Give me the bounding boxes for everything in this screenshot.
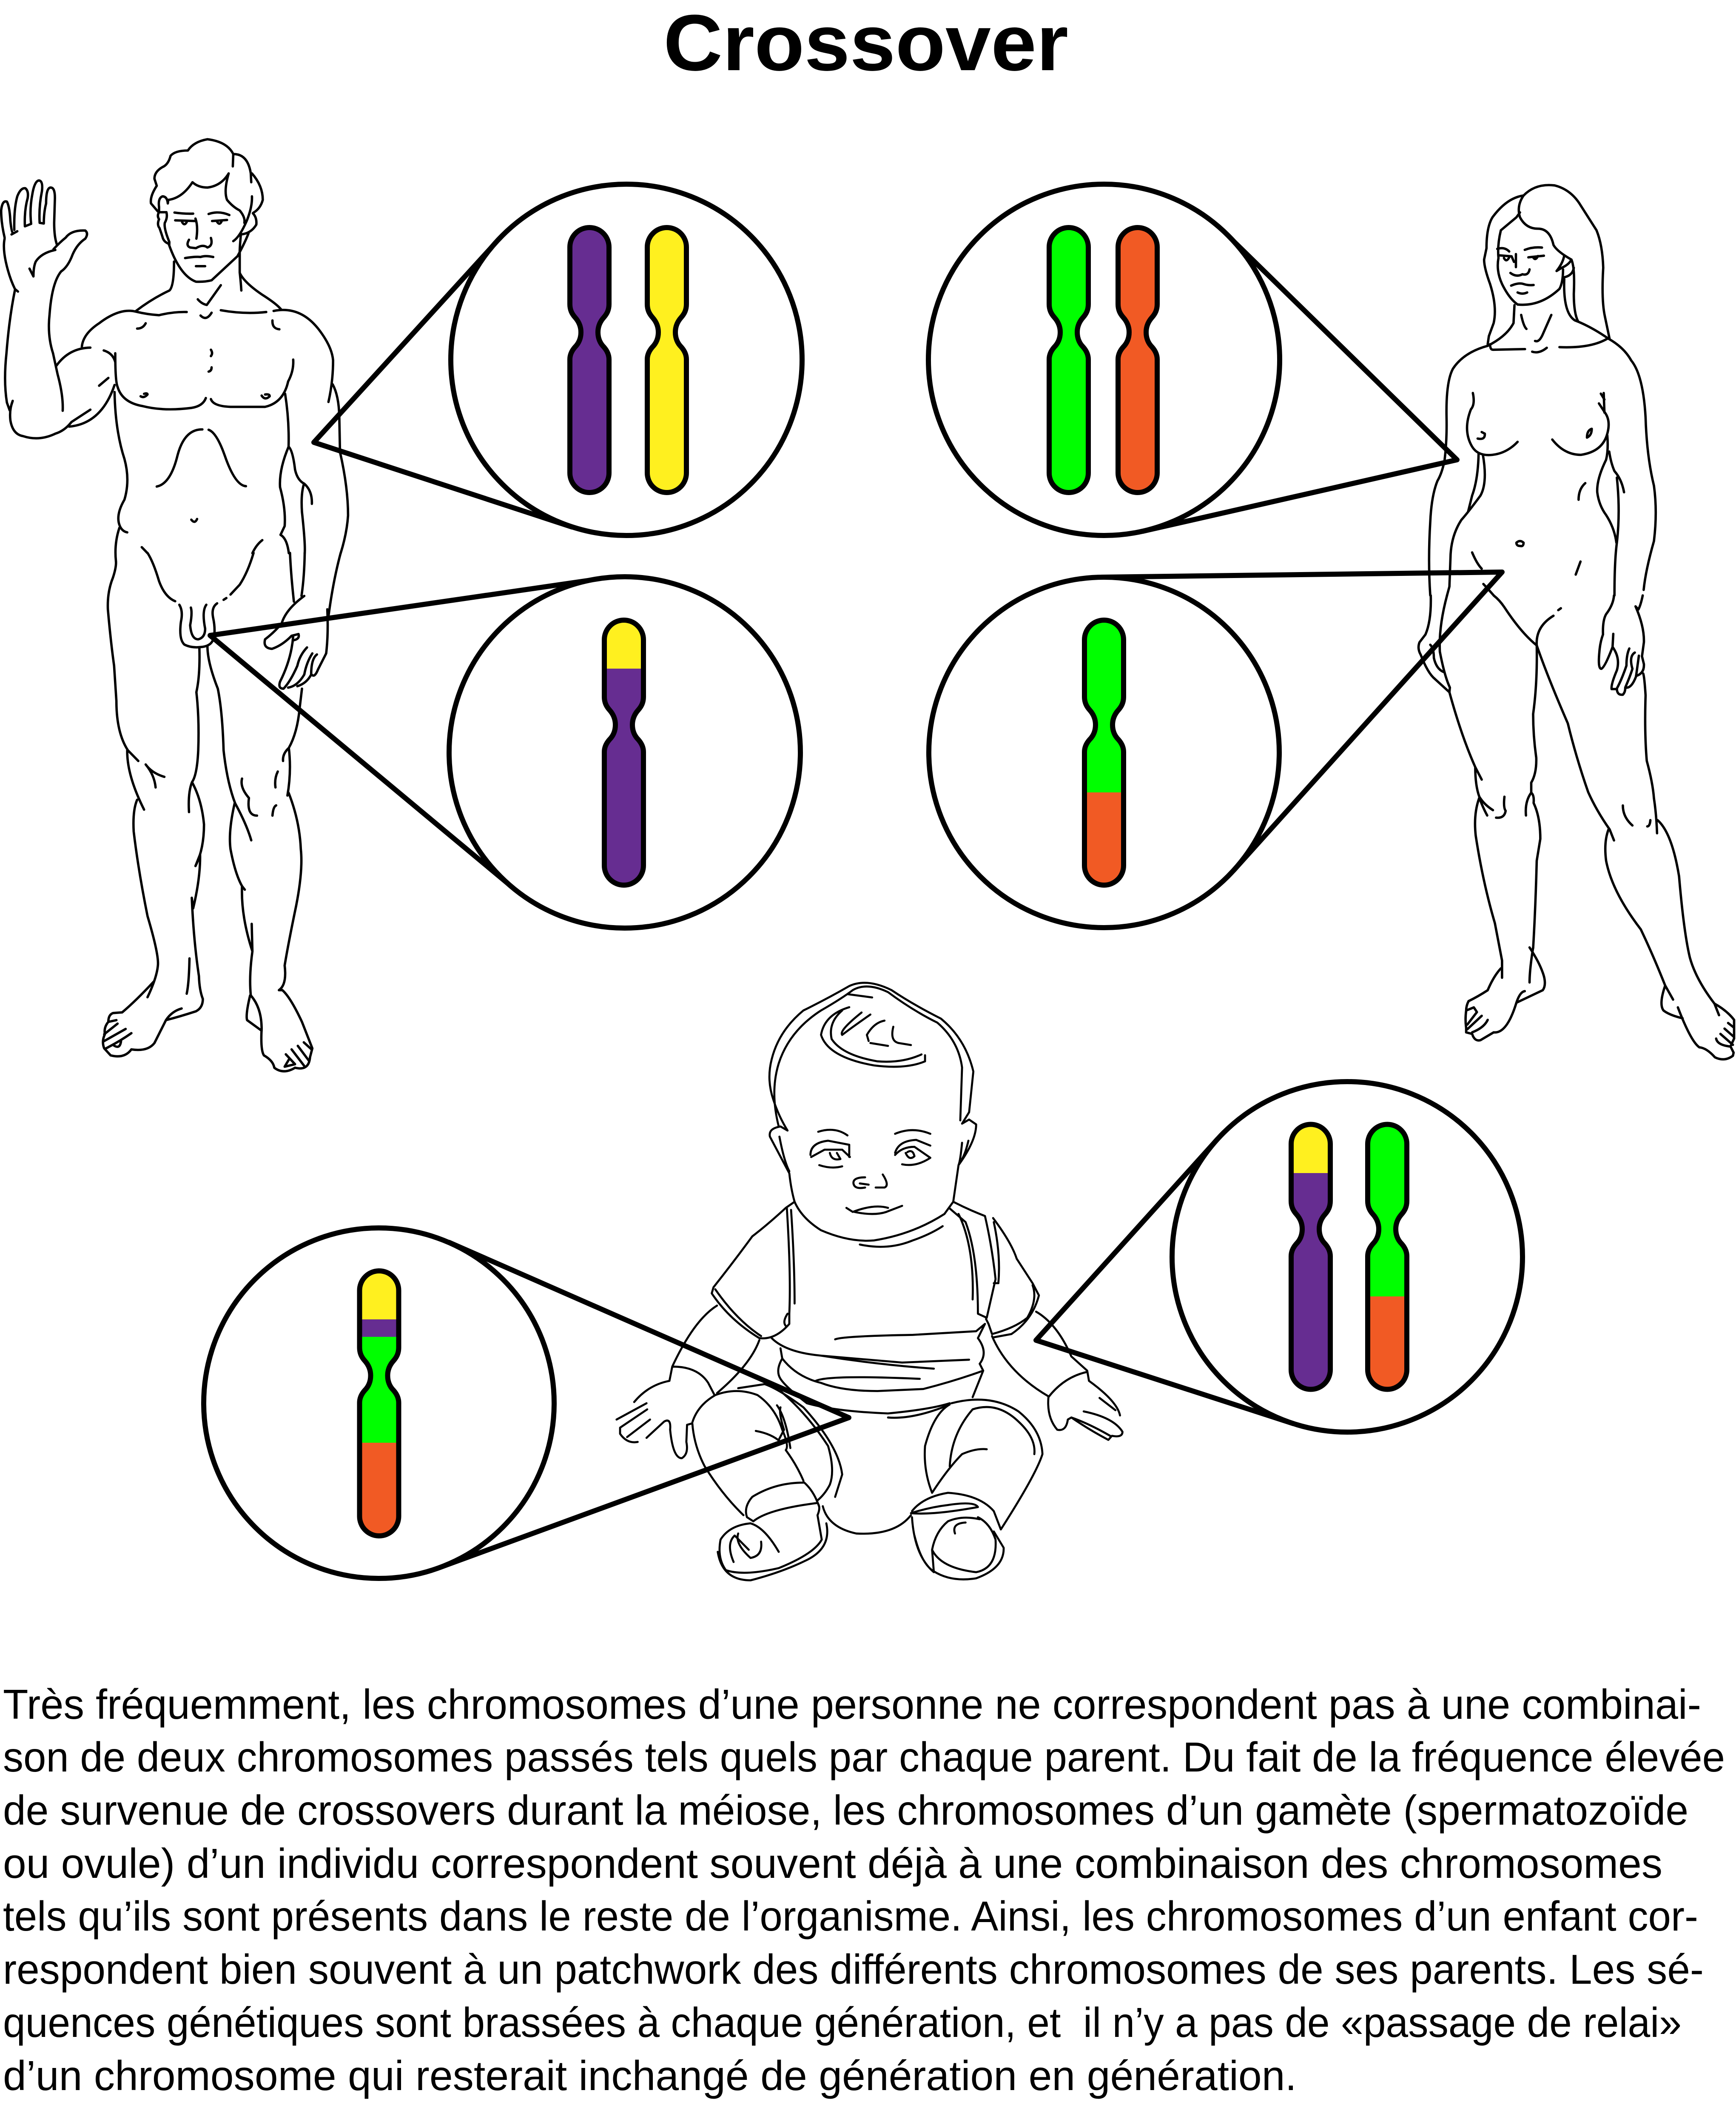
woman: hand at left <box>1419 595 1450 692</box>
woman: lower body <box>1419 595 1734 1060</box>
man: lowered hand <box>265 553 341 689</box>
pointer to man's groin <box>210 579 600 888</box>
pointer to baby's groin <box>439 1242 849 1568</box>
magnifier circle <box>449 577 800 928</box>
explanatory paragraph: de survenue de crossovers durant la méiose, les chromosomes d’un gamète (spermatozoïde <box>3 1787 1688 1834</box>
magnifier circle <box>929 577 1279 928</box>
baby: belly folds <box>771 1324 985 1418</box>
title: Crossover <box>663 0 1068 87</box>
man: raised hand <box>1 180 87 291</box>
callout: mother somatic chromosomes <box>928 184 1457 535</box>
chromosome: green <box>1047 225 1090 498</box>
chromosome: orange <box>1116 225 1159 498</box>
pointer to woman's groin <box>1102 572 1502 870</box>
woman: hair <box>1484 185 1610 344</box>
figure: baby <box>617 983 1122 1581</box>
magnifier circle <box>1172 1082 1523 1432</box>
explanatory paragraph: ou ovule) d’un individu correspondent souvent déjà à une combinaison des chromosomes <box>3 1840 1662 1887</box>
explanatory paragraph: Très fréquemment, les chromosomes d’une personne ne correspondent pas à une combinai- <box>3 1681 1701 1728</box>
woman: hips and groin <box>1494 595 1561 645</box>
baby: face <box>811 1130 943 1247</box>
baby: leg and foot at right <box>911 1400 1042 1579</box>
woman: hand at right <box>1599 595 1644 695</box>
chromosome: yellow <box>646 225 688 498</box>
explanatory paragraph: quences génétiques sont brassées à chaque génération, et il n’y a pas de «passage de relai» <box>3 1999 1682 2046</box>
man: abdomen and torso sides <box>114 392 262 561</box>
woman: torso <box>1447 435 1624 595</box>
baby: hair <box>821 994 925 1067</box>
chromosome: yellow and purple recombinant <box>603 618 645 890</box>
baby: leg and foot at left <box>692 1384 911 1581</box>
baby: arm and hand at right <box>992 1312 1122 1440</box>
pointer to baby's body <box>1036 1139 1293 1424</box>
callout: mother gamete chromosome <box>929 572 1502 928</box>
callout: baby gamete chromosome <box>204 1228 849 1578</box>
woman: right leg <box>1537 645 1734 1060</box>
baby: head outline <box>769 983 976 1241</box>
explanatory paragraph: son de deux chromosomes passés tels quels par chaque parent. Du fait de la fréquence élevée <box>3 1734 1725 1780</box>
chromosome: green and orange <box>1366 1122 1409 1394</box>
man: lowered arm <box>280 384 348 553</box>
callout: father gamete chromosome <box>210 577 800 928</box>
magnifier circle <box>928 184 1280 535</box>
explanatory paragraph: respondent bien souvent à un patchwork des différents chromosomes de ses parents. Les sé- <box>3 1946 1704 1993</box>
man: other leg <box>208 647 312 1071</box>
baby: shirt <box>712 1202 1039 1339</box>
woman: left leg <box>1449 645 1545 1040</box>
chromosome: four-colour recombinant <box>358 1269 401 1541</box>
chromosome: yellow and purple <box>1289 1122 1332 1394</box>
woman: neck, shoulders and arms <box>1429 279 1656 595</box>
explanatory paragraph <box>3 1681 1725 2099</box>
chromosome: green and orange recombinant <box>1083 618 1125 890</box>
man: raised arm <box>5 271 115 438</box>
pointer to woman's body <box>1143 234 1457 531</box>
man: right-of-page leg <box>103 561 204 1057</box>
man: chest and shoulders <box>82 251 333 409</box>
man: lower body <box>103 553 341 1071</box>
man: groin <box>148 553 253 647</box>
baby: arm and hand at left <box>617 1306 759 1458</box>
magnifier circle <box>451 184 802 535</box>
woman: chest <box>1467 393 1609 455</box>
explanatory paragraph: tels qu’ils sont présents dans le reste de l’organisme. Ainsi, les chromosomes d’un enfant cor- <box>3 1893 1698 1940</box>
pointer to man's body <box>314 241 572 527</box>
man: head and hair <box>151 139 263 282</box>
man: face <box>174 213 229 266</box>
explanatory paragraph: d’un chromosome qui resterait inchangé de génération en génération. <box>3 2052 1297 2099</box>
woman: head and face <box>1497 212 1574 305</box>
figure: man <box>1 139 348 1071</box>
figure: woman <box>1419 185 1734 1060</box>
man: upper body <box>1 139 348 561</box>
callout: father somatic chromosomes <box>314 184 802 535</box>
magnifier circle <box>204 1228 554 1578</box>
chromosome: purple <box>568 225 611 498</box>
callout: baby chromosome pair <box>1036 1082 1523 1432</box>
woman: upper body <box>1429 185 1656 595</box>
